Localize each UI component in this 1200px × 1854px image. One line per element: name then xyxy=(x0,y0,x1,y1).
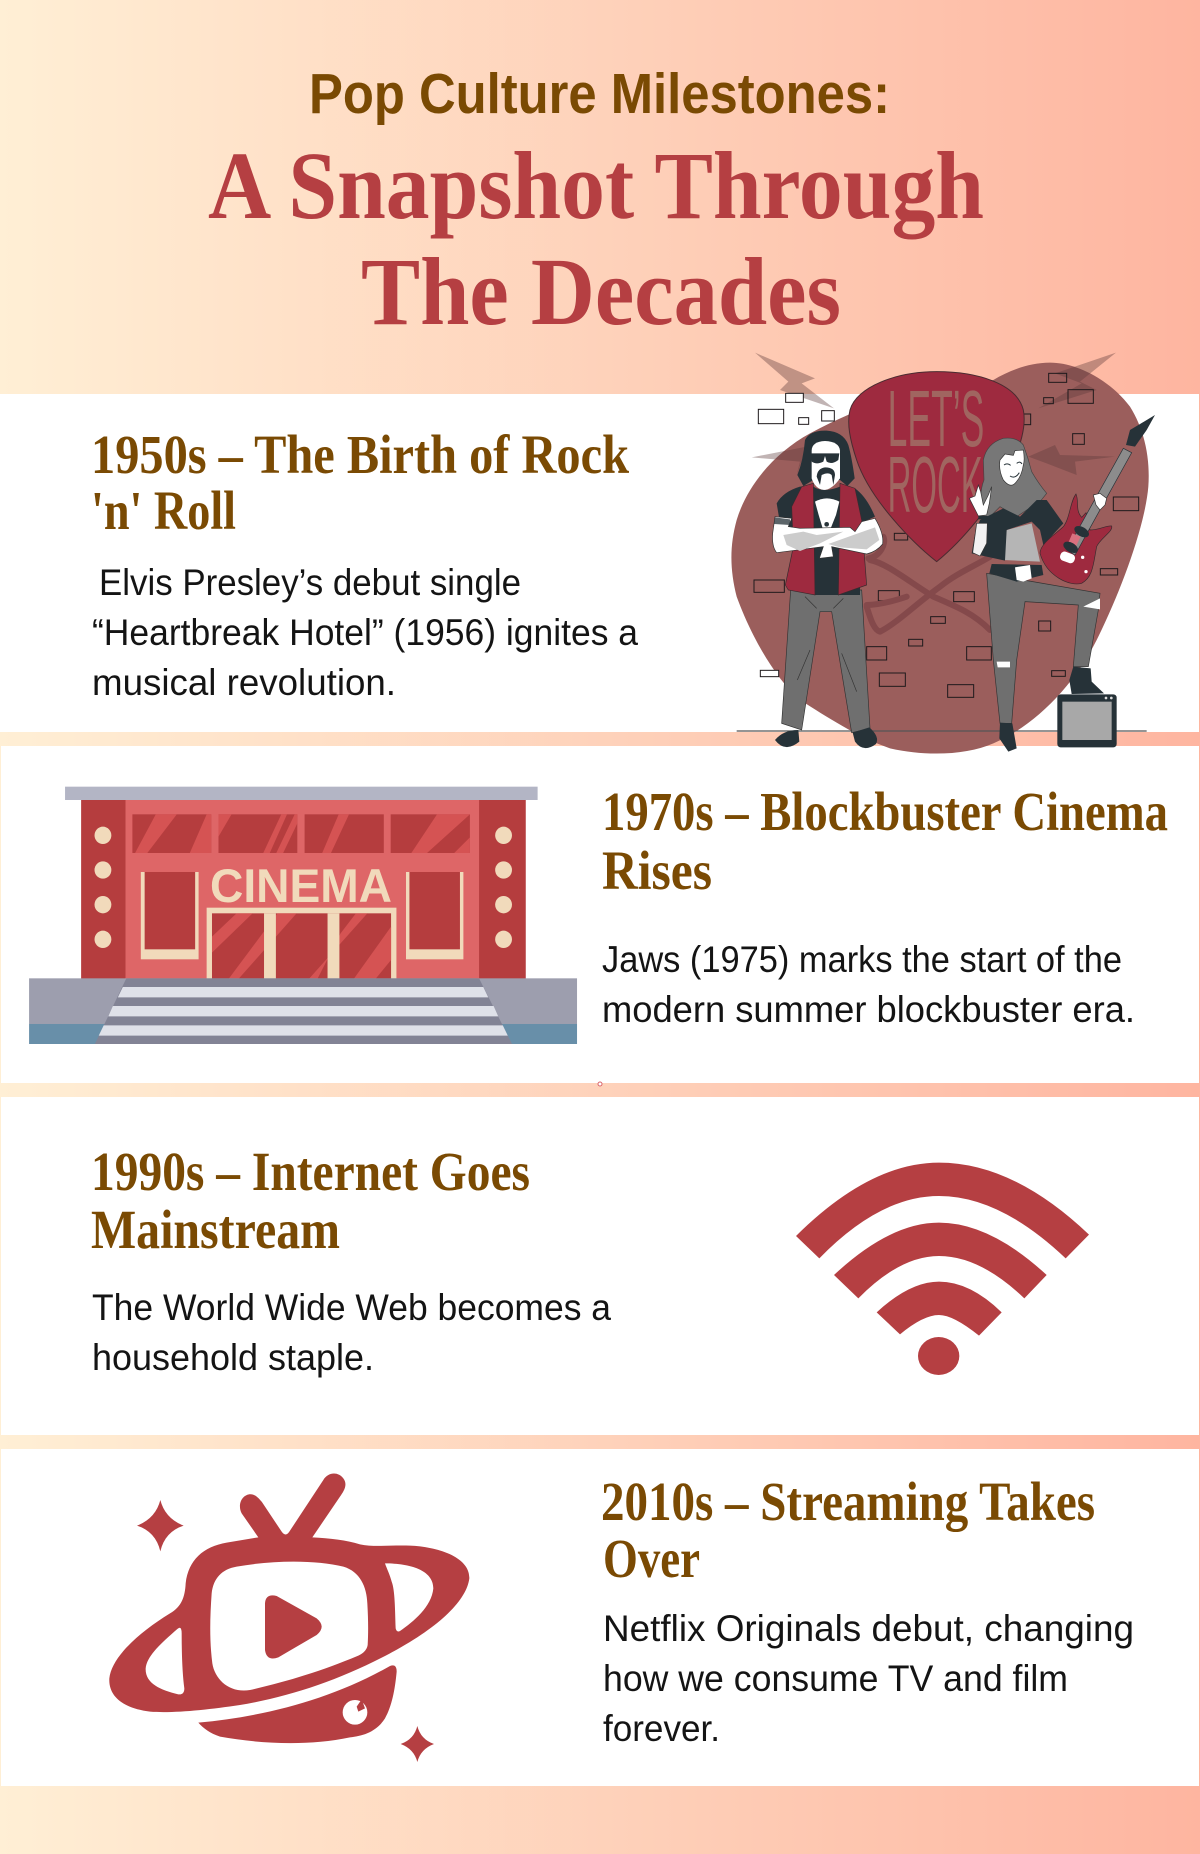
text block: 1950s: “Heartbreak Hotel” (1956) ignites a xyxy=(92,612,638,653)
text block: 1950s xyxy=(92,562,638,703)
text block: 2010s: forever. xyxy=(603,1708,720,1749)
panel: 1990s xyxy=(1,1097,1199,1435)
heading: 2010s: 2010s – Streaming Takes xyxy=(601,1471,1095,1532)
text block: 1990s xyxy=(92,1287,611,1378)
guitar xyxy=(1040,415,1155,584)
icon: streaming TV planet xyxy=(109,1474,469,1762)
crossed bones xyxy=(867,537,990,632)
text block: 1970s: modern summer blockbuster era. xyxy=(602,989,1135,1030)
pick lettering xyxy=(888,374,984,529)
bricks xyxy=(754,373,1139,697)
text block: 1970s: Jaws (1975) marks the start of the xyxy=(602,939,1122,980)
amplifier xyxy=(1057,694,1117,747)
figure: woman xyxy=(969,438,1104,752)
heading: 2010s: Over xyxy=(603,1528,700,1589)
text block: 1950s: Elvis Presley’s debut single xyxy=(99,562,521,603)
illustration: Let's Rock rockers xyxy=(731,353,1155,754)
blob backdrop xyxy=(731,363,1149,754)
text block: 1990s: household staple. xyxy=(92,1337,374,1378)
cinema sign: CINEMA xyxy=(210,859,392,912)
lightning bolts xyxy=(752,353,1116,475)
floor line xyxy=(737,729,1147,733)
text block: 1970s xyxy=(602,939,1135,1030)
illustration: cinema building xyxy=(29,787,577,1044)
heading: 1970s: Rises xyxy=(602,840,712,901)
heading: 1990s: 1990s – Internet Goes xyxy=(91,1141,530,1202)
text block: 1950s: musical revolution. xyxy=(92,662,396,703)
text block: 2010s: Netflix Originals debut, changing xyxy=(603,1608,1134,1649)
text block: 2010s: how we consume TV and film xyxy=(603,1658,1068,1699)
heading: 2010s xyxy=(601,1471,1095,1589)
text block: 1990s: The World Wide Web becomes a xyxy=(92,1287,611,1328)
small marker dot xyxy=(598,1082,602,1086)
heading: 1950s: 'n' Roll xyxy=(91,480,236,541)
panel: 2010s xyxy=(1,1449,1199,1786)
illustration: Let's Rock rockers: ROCK xyxy=(888,440,983,529)
heading: 1970s xyxy=(602,781,1168,901)
heading: 1950s: 1950s – The Birth of Rock xyxy=(91,424,629,485)
illustration: Let's Rock rockers: LET’S xyxy=(888,374,984,463)
guitar pick xyxy=(849,372,1024,562)
title line: A Snapshot Through: A Snapshot Through xyxy=(208,132,984,239)
heading: 1990s: Mainstream xyxy=(91,1199,340,1260)
title line: Pop Culture Milestones: Pop Culture Milestones: xyxy=(309,62,890,126)
icon: wifi xyxy=(796,1163,1089,1375)
text block: 2010s xyxy=(603,1608,1134,1749)
panel: 1970s xyxy=(1,746,1199,1083)
heading: 1950s xyxy=(91,424,629,541)
heading: 1990s xyxy=(91,1141,530,1260)
title xyxy=(208,62,984,345)
panel: 1950s xyxy=(0,394,1199,732)
figure: man xyxy=(772,431,883,748)
title line: The Decades: The Decades xyxy=(361,238,841,345)
